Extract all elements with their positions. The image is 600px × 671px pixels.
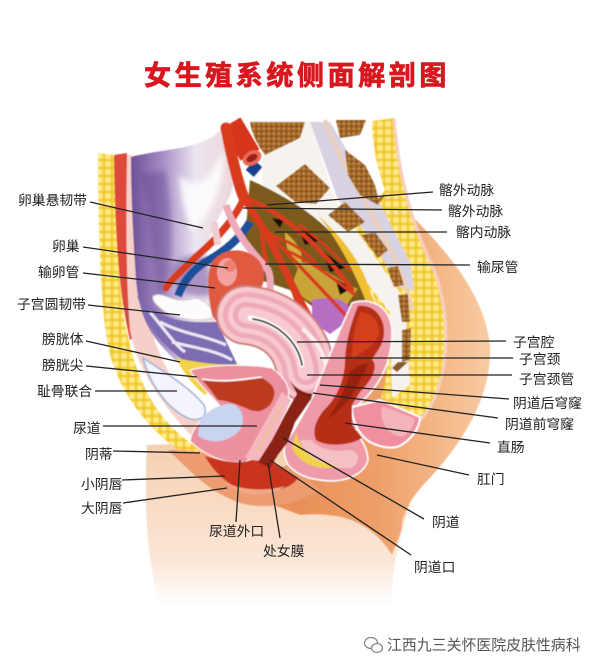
- artery trunk: [231, 123, 250, 155]
- spine disc white: [250, 120, 410, 398]
- rectum lumen: [314, 306, 384, 445]
- anatomical labels: 输尿管: [477, 260, 518, 275]
- anatomical labels: 髂外动脉: [448, 203, 503, 219]
- leader lines: [83, 192, 513, 555]
- anatomical labels: 耻骨联合: [37, 384, 92, 399]
- anatomical labels: 尿道: [73, 421, 101, 436]
- thigh and skin: [146, 440, 410, 605]
- anatomical labels: 阴道口: [414, 560, 455, 575]
- anatomical labels: 子宫颈管: [519, 372, 574, 387]
- bladder wall: [190, 365, 289, 462]
- retropubic tissue: [198, 404, 243, 441]
- anatomical labels: 阴道: [432, 515, 460, 530]
- anatomical labels: 处女膜: [263, 543, 305, 559]
- muscle gold: [292, 262, 358, 309]
- anatomical labels: 肛门: [477, 472, 505, 487]
- arteries: [166, 128, 355, 322]
- vein: [178, 222, 250, 296]
- yellow by bladder: [176, 358, 240, 395]
- rectum and anal canal wall: [284, 301, 392, 481]
- anatomical labels: [17, 182, 582, 575]
- peritoneum wall: [126, 155, 225, 450]
- vertebra 2: [276, 164, 330, 204]
- anatomical labels: 阴道前穹窿: [505, 416, 574, 432]
- purple membrane: [131, 120, 235, 370]
- buttock: [240, 218, 490, 555]
- anatomical labels: 输卵管: [38, 265, 79, 280]
- vulva: [205, 456, 298, 492]
- anatomical labels: 尿道外口: [209, 524, 264, 539]
- anatomical labels: 膀胱尖: [42, 357, 84, 373]
- perineal yellow fat: [292, 432, 338, 468]
- ovary and tube: [208, 250, 264, 330]
- anal canal inner band: [300, 440, 358, 468]
- front abdominal fat: [98, 153, 205, 452]
- ovary suspensory ligament: [214, 222, 218, 245]
- anatomical labels: 小阴唇: [81, 477, 123, 492]
- pubic symphysis: [143, 358, 205, 419]
- uterus body: [246, 315, 326, 388]
- purple organ behind rectum: [312, 298, 352, 334]
- vertebra 1: [250, 122, 305, 155]
- front muscle stripe: [114, 153, 138, 340]
- lower purple folds: [137, 295, 238, 366]
- ureter: [226, 205, 270, 298]
- anatomical labels: 髂外动脉: [439, 182, 494, 198]
- anatomical labels: 膀胱体: [42, 331, 84, 347]
- skin edge line: [394, 118, 446, 420]
- groin skin band: [168, 450, 320, 506]
- urethra: [245, 392, 291, 462]
- anatomical labels: 卵巢: [52, 239, 80, 254]
- anatomical labels: 直肠: [497, 439, 525, 455]
- round ligament white: [153, 295, 213, 320]
- rectal ampulla loop: [352, 400, 420, 448]
- anatomical labels: 大阴唇: [81, 501, 123, 516]
- anatomical labels: 卵巢悬韧带: [18, 193, 87, 208]
- anatomy illustration: [98, 118, 490, 605]
- back fat layer: [340, 118, 446, 420]
- dark gaps: [272, 218, 352, 295]
- icon: wechat: [364, 638, 382, 652]
- purple shading: [140, 170, 171, 300]
- anatomical labels: 阴蒂: [85, 447, 113, 462]
- sacral bones: [336, 120, 366, 138]
- title: 女生殖系统侧面解剖图: [144, 61, 450, 91]
- cervix tip: [290, 380, 326, 398]
- pelvic cavity: [245, 180, 365, 312]
- pelvic rim fat: [318, 215, 382, 312]
- vagina: [258, 392, 312, 468]
- anatomical labels: 子宫圆韧带: [17, 297, 86, 312]
- watermark: 江西九三关怀医院皮肤性病科: [387, 636, 581, 654]
- anatomical labels: 子宫腔: [513, 335, 555, 350]
- anatomical labels: 阴道后穹窿: [513, 396, 582, 411]
- anatomical labels: 子宫颈: [519, 352, 561, 367]
- bladder lumen: [202, 378, 274, 411]
- anatomical labels: 髂内动脉: [456, 224, 511, 240]
